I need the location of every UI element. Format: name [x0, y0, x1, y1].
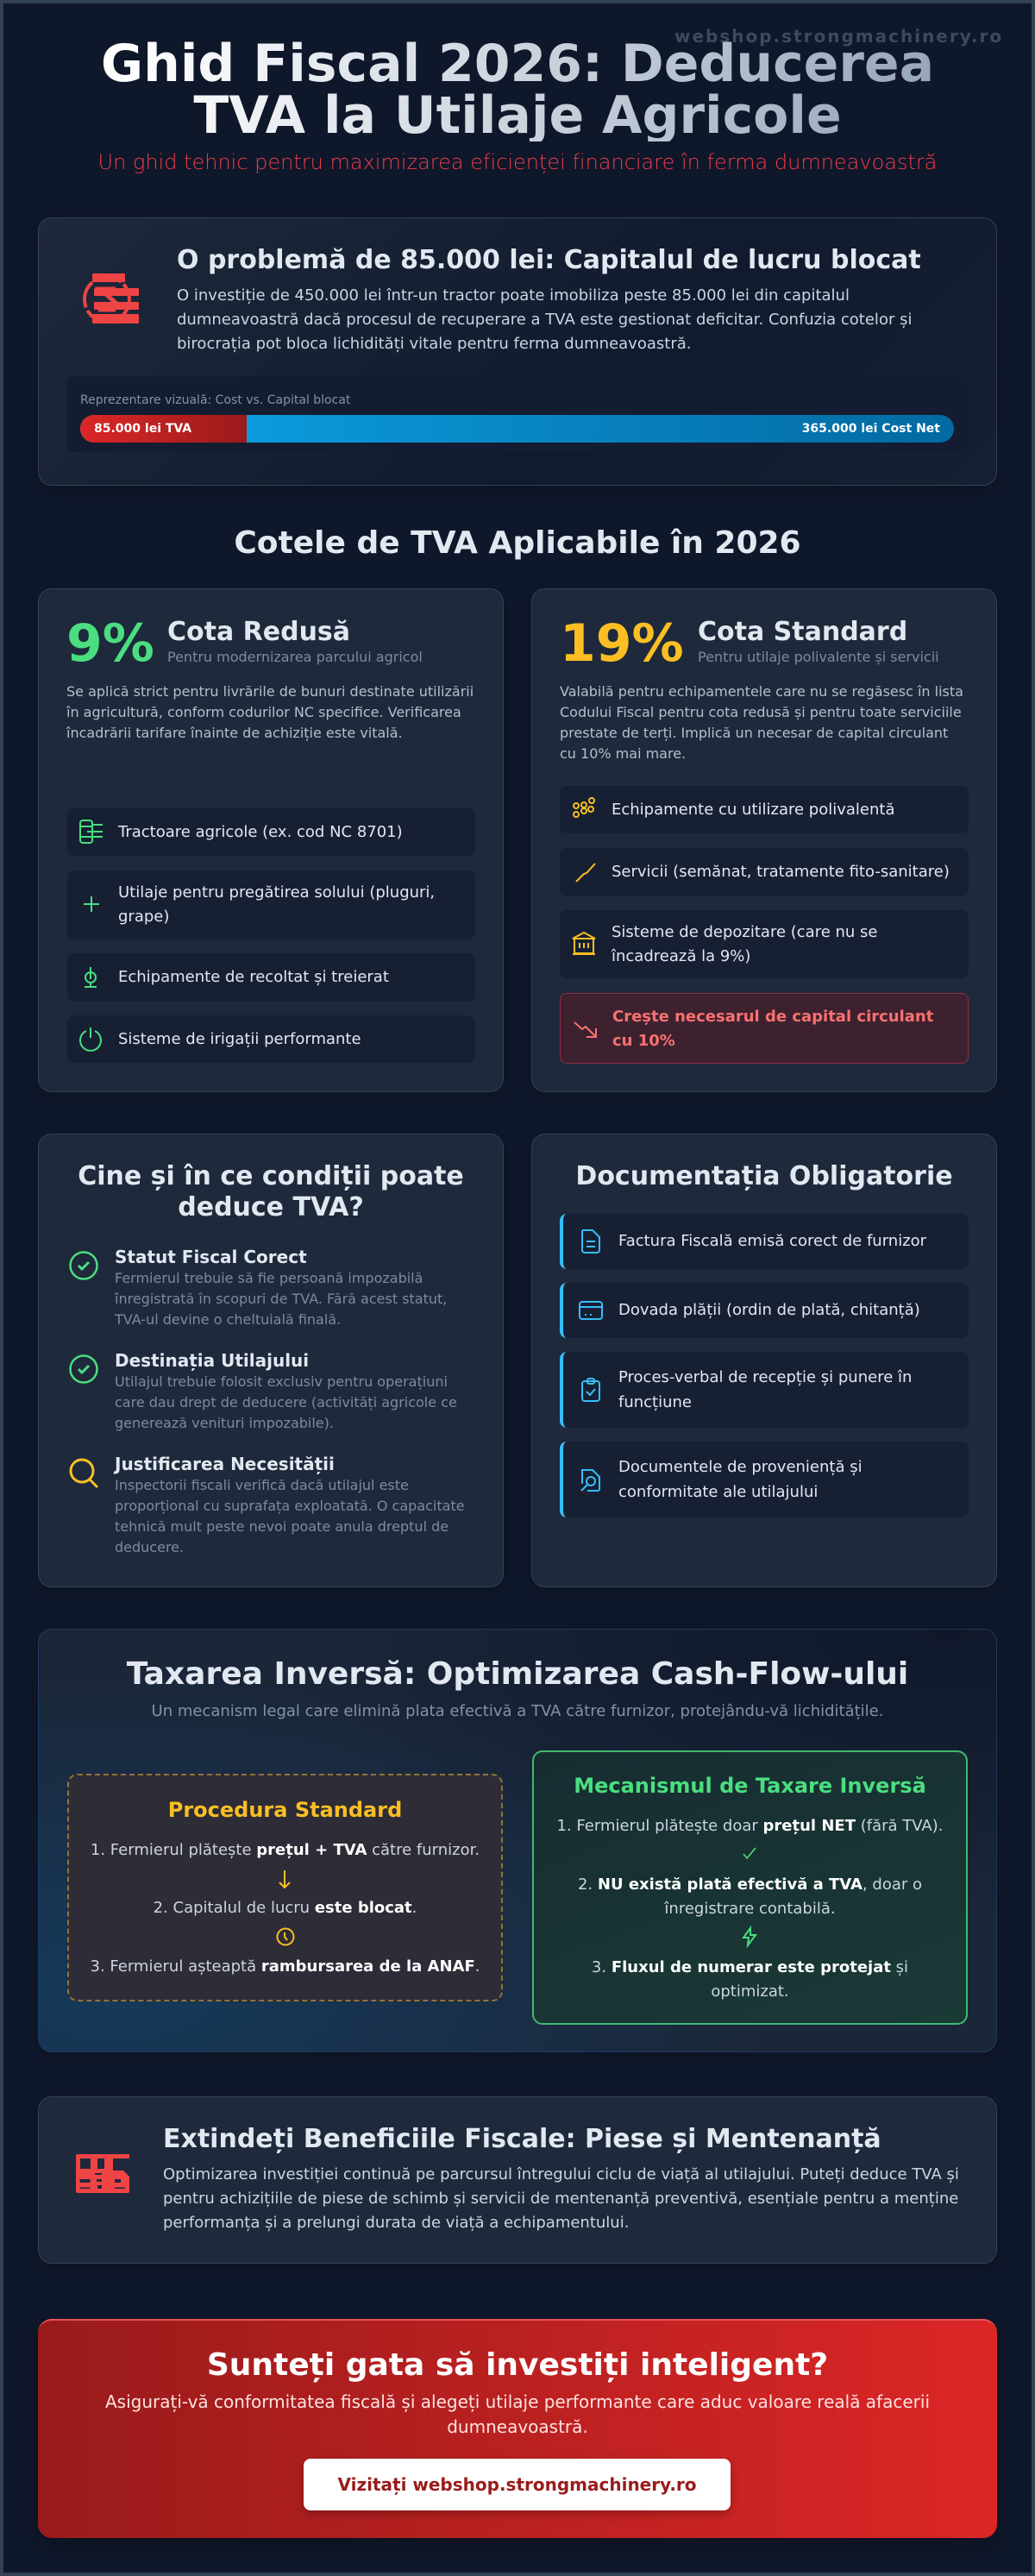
- description: [66, 683, 474, 741]
- condition text: [115, 1373, 457, 1431]
- heading: Cine și în ce condiții poate: [78, 1161, 464, 1191]
- condition text: TVA-ul devine o cheltuială finală.: [115, 1311, 341, 1328]
- panel: required documents: [531, 1134, 997, 1587]
- item text: Sisteme de irigații performante: [118, 1030, 361, 1048]
- cta button: [304, 2459, 731, 2510]
- step 3: [534, 1956, 966, 2004]
- icon: plus: [84, 896, 99, 912]
- box: reverse charge mechanism: [532, 1750, 968, 2025]
- rate number: 19%: [560, 613, 684, 674]
- condition text: proporțional cu suprafața exploatată. O capacitate: [115, 1498, 465, 1514]
- chart panel: cost vs capital: [67, 376, 969, 452]
- title: [38, 38, 997, 141]
- rate number: 9%: [66, 613, 154, 674]
- description: cu 10% mai mare.: [560, 745, 686, 762]
- condition text: generează venituri impozabile).: [115, 1415, 334, 1431]
- alert: capital increase: [560, 993, 969, 1064]
- icon: bolt: [742, 1927, 757, 1946]
- list item: services: [560, 848, 969, 896]
- icon: clock: [276, 1927, 295, 1946]
- icon: blocked capital: [83, 273, 139, 324]
- heading: Documentația Obligatorie: [575, 1161, 953, 1191]
- description: încadrării tarifare înainte de achiziție este vitală.: [66, 725, 403, 741]
- step 1: 1. Fermierul plătește doar prețul NET (fără TVA).: [557, 1817, 943, 1835]
- document text: [618, 1368, 912, 1411]
- document text: conformitate ale utilajului: [618, 1482, 818, 1501]
- document text: Factura Fiscală emisă corect de furnizor: [618, 1232, 926, 1250]
- item text: Echipamente cu utilizare polivalentă: [612, 801, 894, 819]
- condition: necessity: [69, 1454, 465, 1555]
- step 2: 2. Capitalul de lucru este blocat.: [154, 1899, 417, 1917]
- header: title block: [98, 34, 937, 174]
- title: TVA la Utilaje Agricole: [193, 85, 842, 146]
- condition text: Inspectorii fiscali verifică dacă utilajul este: [115, 1477, 409, 1493]
- icon: down arrow: [279, 1870, 291, 1889]
- body text: dumneavoastră dacă procesul de recuperare a TVA este gestionat deficitar. Confuzia cotelor și: [177, 311, 912, 329]
- body text: O investiție de 450.000 lei într-un tractor poate imobiliza peste 85.000 lei din capitalul: [177, 286, 850, 305]
- condition title: Destinația Utilajului: [115, 1350, 309, 1371]
- cta text: dumneavoastră.: [447, 2416, 588, 2437]
- bar segment: net cost: 365.000 lei Cost Net: [802, 422, 940, 436]
- alert text: cu 10%: [612, 1032, 675, 1049]
- heading: Extindeți Beneficiile Fiscale: Piese și Mentenanță: [163, 2124, 881, 2154]
- step 2: [578, 1875, 922, 1918]
- chart label: Reprezentare vizuală: Cost vs. Capital blocat: [80, 393, 350, 407]
- stacked bar: [80, 415, 954, 443]
- body text: performanța și a prelungi durata de viață a echipamentului.: [163, 2214, 629, 2232]
- icon: harvester: [85, 967, 97, 988]
- document text: Documentele de proveniență și: [618, 1458, 862, 1476]
- box title: Mecanismul de Taxare Inversă: [574, 1774, 926, 1798]
- icon: warehouse: [573, 932, 595, 955]
- list item: harvesting: [67, 953, 475, 1002]
- condition title: Statut Fiscal Corect: [115, 1247, 307, 1267]
- body text: [177, 286, 912, 353]
- icon: check circle: [69, 1251, 98, 1280]
- rate title: Cota Standard: [698, 617, 907, 647]
- rate subtitle: Pentru utilaje polivalente și servicii: [698, 649, 939, 665]
- document: payment proof: [560, 1283, 969, 1338]
- document text: Proces-verbal de recepție și punere în: [618, 1368, 912, 1386]
- icon: file search: [580, 1469, 600, 1492]
- item text: Echipamente de recoltat și treierat: [118, 968, 389, 986]
- bar segment: TVA: 85.000 lei TVA: [94, 422, 191, 436]
- heading: O problemă de 85.000 lei: Capitalul de lucru blocat: [177, 245, 921, 275]
- panel: extended benefits: [38, 2096, 997, 2264]
- rate title: Cota Redusă: [167, 617, 350, 647]
- condition title: Justificarea Necesității: [115, 1454, 335, 1474]
- icon: parts: [76, 2154, 129, 2194]
- panel: reverse charge: [38, 1629, 997, 2052]
- body text: pentru achizițiile de piese de schimb și servicii de mentenanță preventivă, esențiale pentru a menține: [163, 2190, 958, 2208]
- step 1: 1. Fermierul plătește prețul + TVA către furnizor.: [91, 1841, 480, 1859]
- panel: problem: [38, 217, 997, 486]
- condition text: înregistrată în scopuri de TVA. Fără acest statut,: [115, 1291, 447, 1307]
- icon: clipboard check: [581, 1378, 600, 1402]
- panel: eligibility conditions: [38, 1134, 504, 1587]
- condition text: [114, 1270, 447, 1328]
- icon: gears: [573, 797, 595, 818]
- alert text: [612, 1008, 933, 1049]
- icon: trend down: [574, 1021, 597, 1038]
- cta button: Vizitați webshop.strongmachinery.ro: [337, 2474, 697, 2495]
- heading: Taxarea Inversă: Optimizarea Cash-Flow-ului: [127, 1656, 908, 1692]
- list item: multipurpose: [560, 786, 969, 833]
- description: în agricultură, conform codurilor NC specifice. Verificarea: [66, 704, 461, 720]
- box: standard procedure: [67, 1774, 503, 2001]
- document: provenance: [560, 1442, 969, 1517]
- document text: Dovada plății (ordin de plată, chitanță): [618, 1301, 920, 1319]
- cta text: [38, 2390, 997, 2440]
- condition text: care dau drept de deducere (activități agricole ce: [115, 1394, 457, 1411]
- item text: Utilaje pentru pregătirea solului (pluguri,: [118, 883, 435, 902]
- icon: magnifier: [69, 1458, 98, 1488]
- body text: birocrația pot bloca lichidități vitale pentru ferma dumneavoastră.: [177, 335, 691, 353]
- step 3: 3. Fluxul de numerar este protejat și: [592, 1958, 908, 1976]
- list item: soil preparation: [67, 870, 475, 939]
- call to action panel: [38, 2319, 997, 2538]
- icon: card: [579, 1301, 603, 1320]
- document: invoice: [560, 1214, 969, 1269]
- document text: [618, 1458, 862, 1501]
- item text: [611, 923, 878, 964]
- subheading: Un mecanism legal care elimină plata efectivă a TVA către furnizor, protejându-vă lichiditățile.: [152, 1702, 883, 1720]
- condition: machine destination: [69, 1350, 457, 1431]
- heading: [78, 1161, 464, 1222]
- subtitle: Un ghid tehnic pentru maximizarea eficienței financiare în ferma dumneavoastră: [98, 150, 937, 174]
- bar segment: TVA: [80, 415, 247, 443]
- document: reception report: [560, 1352, 969, 1428]
- condition text: [115, 1477, 465, 1555]
- icon: file: [581, 1229, 600, 1253]
- body text: [163, 2163, 959, 2235]
- icon: tractor: [79, 820, 103, 844]
- step 3: 3. Fermierul așteaptă rambursarea de la ANAF.: [90, 1957, 480, 1976]
- heading: deduce TVA?: [178, 1192, 364, 1222]
- title: Ghid Fiscal 2026: Deducerea: [101, 34, 934, 94]
- item text: Servicii (semănat, tratamente fito-sanitare): [612, 863, 950, 881]
- cta text: Asigurați-vă conformitatea fiscală și alegeți utilaje performante care aduc valoare reală afacerii: [105, 2391, 930, 2412]
- icon: power: [79, 1027, 102, 1052]
- item text: [118, 883, 435, 925]
- description: [560, 683, 963, 762]
- panel: standard rate 19%: [531, 588, 997, 1092]
- step 2: 2. NU există plată efectivă a TVA, doar o: [578, 1875, 922, 1894]
- item text: Sisteme de depozitare (care nu se: [612, 923, 878, 941]
- panel: reduced rate 9%: [38, 588, 504, 1092]
- condition: fiscal status: [69, 1247, 447, 1328]
- condition text: tehnică mult peste nevoi poate anula dreptul de: [115, 1518, 448, 1535]
- description: prestate de terți. Implică un necesar de capital circulant: [560, 725, 948, 741]
- description: Se aplică strict pentru livrările de bunuri destinate utilizării: [66, 683, 474, 700]
- body text: Optimizarea investiției continuă pe parcursul întregului ciclu de viață al utilajului. Puteți deduce TVA și: [163, 2165, 959, 2183]
- item text: Tractoare agricole (ex. cod NC 8701): [118, 823, 403, 841]
- condition text: Fermierul trebuie să fie persoană impozabilă: [115, 1270, 423, 1286]
- list item: irrigation: [67, 1015, 475, 1063]
- watermark: webshop.strongmachinery.ro: [674, 26, 1003, 47]
- icon: seeding line: [575, 863, 596, 883]
- cta heading: Sunteți gata să investiți inteligent?: [207, 2347, 828, 2383]
- icon: check circle: [69, 1354, 98, 1384]
- step 3: optimizat.: [711, 1982, 789, 2001]
- box title: Procedura Standard: [168, 1798, 402, 1822]
- item text: grape): [118, 908, 169, 925]
- icon: check: [743, 1848, 756, 1860]
- description: Valabilă pentru echipamentele care nu se regăsesc în lista: [560, 683, 963, 700]
- list item: storage: [560, 910, 969, 978]
- condition text: Utilajul trebuie folosit exclusiv pentru operațiuni: [115, 1373, 448, 1390]
- document text: funcțiune: [618, 1392, 692, 1411]
- condition text: deducere.: [115, 1539, 184, 1555]
- list item: tractors: [67, 808, 475, 856]
- description: Codului Fiscal pentru cota redusă și pentru toate serviciile: [560, 704, 962, 720]
- rate subtitle: Pentru modernizarea parcului agricol: [167, 649, 423, 665]
- step 2: înregistrare contabilă.: [664, 1900, 836, 1918]
- alert text: Crește necesarul de capital circulant: [612, 1008, 933, 1026]
- item text: încadrează la 9%): [612, 947, 750, 964]
- section heading: rates: Cotele de TVA Aplicabile în 2026: [234, 525, 801, 561]
